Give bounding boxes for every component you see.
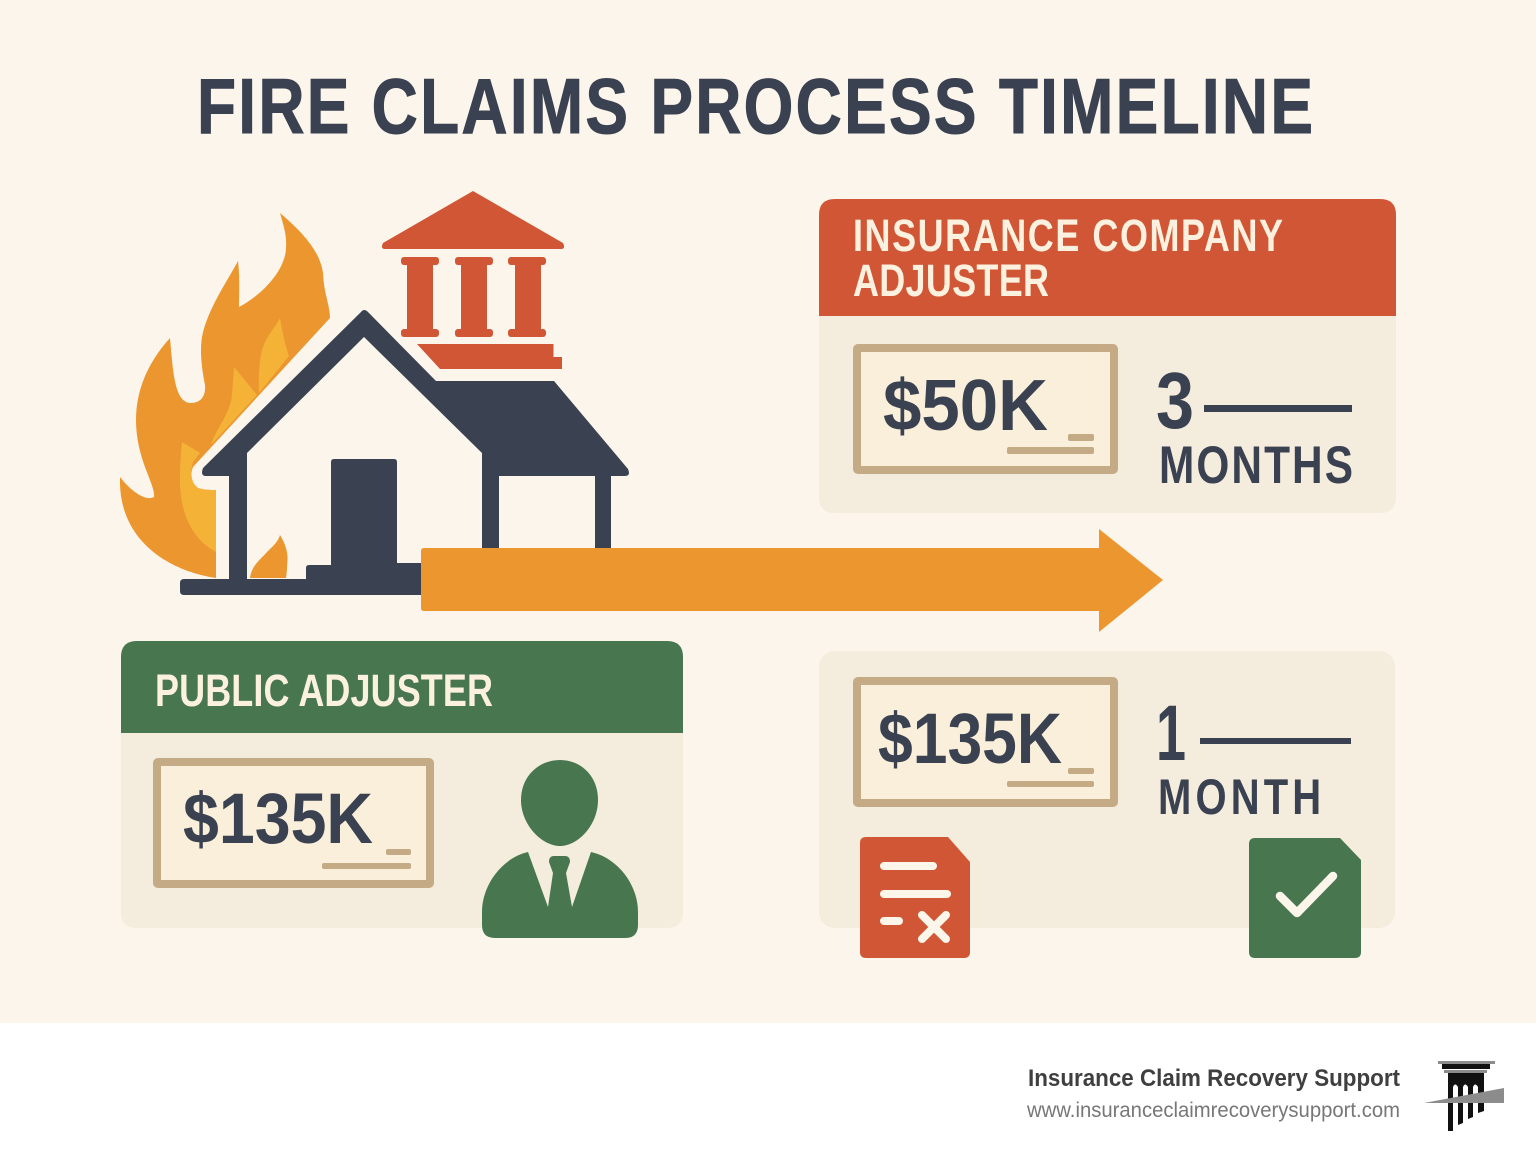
duration: 3 months: MONTHS [1159,437,1353,495]
check: $135K: $135K [183,780,373,859]
panel: public adjuster outcome [819,651,1395,958]
check: $50K [857,348,1114,470]
arrow [421,529,1163,632]
footer [0,1023,1536,1154]
footer website: www.insuranceclaimrecoverysupport.com [1026,1099,1400,1122]
panel header: public adjuster [121,641,683,733]
check: $50K: $50K [883,366,1048,446]
icon: footer logo [1424,1061,1504,1131]
footer company name: Insurance Claim Recovery Support [1028,1065,1400,1092]
heading: insurance company adjuster [853,210,1283,306]
panel header: insurance company adjuster [819,199,1396,316]
title: FIRE CLAIMS PROCESS TIMELINE [197,63,1313,150]
icon: courthouse [382,191,564,369]
heading: public adjuster: PUBLIC ADJUSTER [155,665,493,716]
icon: approved document [1249,838,1361,958]
icon: adjuster person [482,760,638,938]
duration: 1 month: MONTH [1158,769,1321,825]
duration: 3 months: 3 [1156,356,1194,445]
duration: 1 month: 1 [1156,688,1186,777]
duration: 3 months [1156,356,1353,495]
icon: house [180,310,629,595]
check: $135K: $135K [878,700,1062,779]
panel: insurance company adjuster [819,199,1396,513]
duration: 1 month [1156,688,1351,825]
panel: public adjuster [121,641,683,938]
heading: insurance company adjuster: INSURANCE COMPANY [853,210,1283,261]
icon: flames [120,213,330,578]
heading: insurance company adjuster: ADJUSTER [853,255,1049,306]
icon: rejected document [860,837,970,958]
check: $135K [157,762,430,884]
check: $135K [857,681,1114,803]
